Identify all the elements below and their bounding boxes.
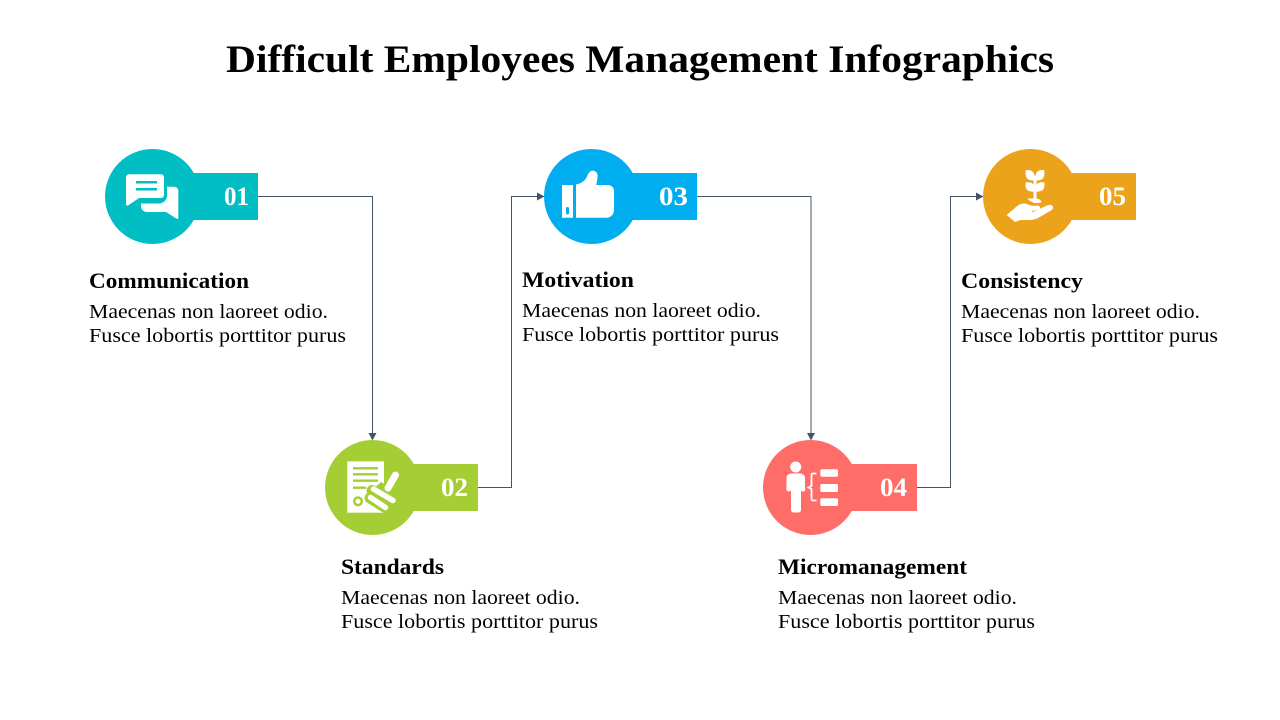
title: Difficult Employees Management Infographics <box>226 38 1054 81</box>
number 02: 02 <box>441 473 468 502</box>
step 01 badge <box>105 149 258 244</box>
text block: Micromanagement: Micromanagement <box>778 554 968 579</box>
number 04: 04 <box>880 473 907 502</box>
text block: Micromanagement: Maecenas non laoreet odio. <box>778 587 1017 609</box>
text block: Consistency: Consistency <box>961 268 1083 293</box>
text block: Communication: Fusce lobortis porttitor purus <box>89 325 346 347</box>
text block: Consistency <box>961 268 1218 347</box>
text block: Motivation: Maecenas non laoreet odio. <box>522 300 761 322</box>
icon: document with brush <box>347 461 396 513</box>
arrow: 02 to 03 <box>478 192 544 488</box>
text block: Communication <box>89 268 346 347</box>
step 04 badge <box>763 440 917 535</box>
text block: Motivation: Motivation <box>522 267 634 292</box>
step 02 badge <box>325 440 478 535</box>
text block: Motivation: Fusce lobortis porttitor purus <box>522 324 779 346</box>
number 01: 01 <box>224 182 249 211</box>
step 05 badge <box>983 149 1136 244</box>
step 03 badge <box>544 149 697 244</box>
text block: Standards: Fusce lobortis porttitor purus <box>341 611 598 633</box>
text block: Micromanagement <box>778 554 1035 633</box>
text block: Communication: Communication <box>89 268 249 293</box>
text block: Standards <box>341 554 598 633</box>
number 03: 03 <box>659 182 688 211</box>
text block: Motivation <box>522 267 779 346</box>
icon: plant in hand <box>1007 170 1053 222</box>
text block: Micromanagement: Fusce lobortis porttitor purus <box>778 611 1035 633</box>
icon: person with task list <box>786 462 838 512</box>
icon: chat bubbles <box>126 174 178 219</box>
text block: Communication: Maecenas non laoreet odio. <box>89 301 328 323</box>
arrow: 03 to 04 <box>697 196 815 440</box>
arrow: 01 to 02 <box>258 196 376 440</box>
text block: Consistency: Maecenas non laoreet odio. <box>961 301 1200 323</box>
text block: Standards: Maecenas non laoreet odio. <box>341 587 580 609</box>
text block: Standards: Standards <box>341 554 444 579</box>
arrow: 04 to 05 <box>917 192 984 488</box>
number 05: 05 <box>1099 182 1126 211</box>
icon: thumbs up <box>562 171 614 218</box>
text block: Consistency: Fusce lobortis porttitor purus <box>961 325 1218 347</box>
